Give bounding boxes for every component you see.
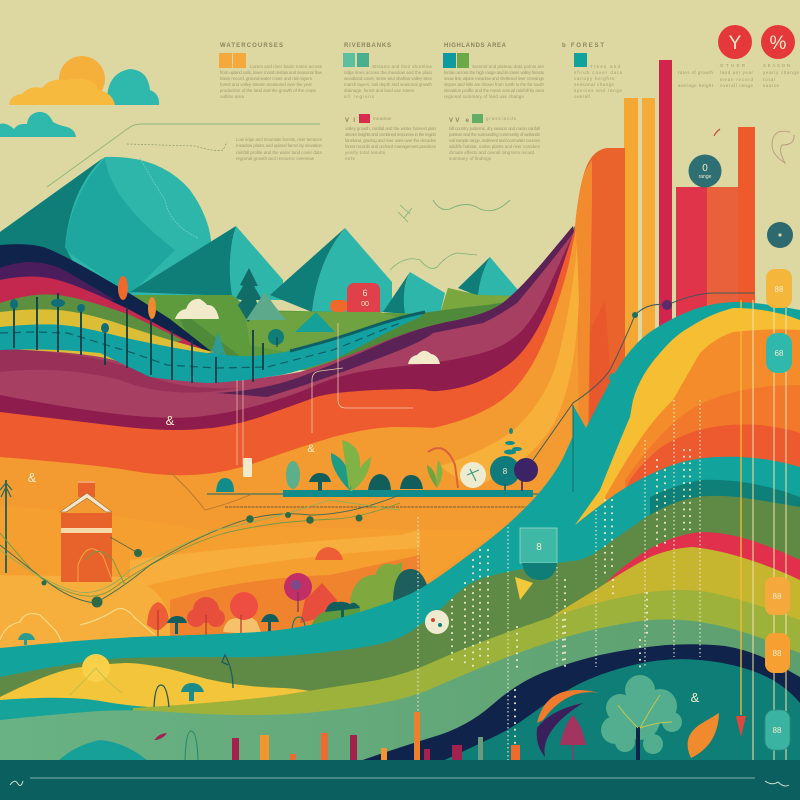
bar group: red block	[676, 187, 707, 387]
leader line	[47, 124, 510, 270]
cloud: small cream cloud	[408, 351, 440, 364]
plant: big leaves	[331, 440, 371, 491]
plant: leaf	[286, 461, 300, 489]
labels under badges: OTHER	[720, 63, 745, 68]
pill: teal lower	[765, 710, 790, 750]
text block: column 1: forest and valley stream measured over the year	[220, 82, 313, 87]
pill: orange middle: 88	[773, 592, 782, 601]
labels under badges: average height	[678, 83, 714, 88]
text block: column 4: canopy heights	[574, 76, 615, 81]
band: teal second	[500, 457, 800, 800]
solid guides	[740, 300, 742, 715]
tag: red label	[330, 283, 380, 312]
labels under badges: total	[763, 77, 775, 82]
tree: big green	[601, 675, 682, 760]
text block: sub-column red: meadow	[373, 116, 392, 121]
plant: dome two	[400, 475, 423, 489]
text block: column 2: all regions	[344, 94, 375, 99]
text block: column 4: b FOREST	[562, 43, 604, 49]
tree trunks	[158, 610, 241, 637]
mountain: large dome	[0, 157, 211, 300]
text block: column 3: HIGHLANDS AREA	[444, 43, 507, 49]
text block: sub-column red	[345, 114, 437, 161]
shelf with plants	[207, 428, 693, 507]
glyph: cream squiggle shelf: &	[307, 443, 315, 455]
tag: red label: 00	[361, 301, 369, 308]
mushroom row	[167, 602, 360, 634]
labels under badges: yearly change	[763, 70, 800, 75]
plant: dome	[368, 474, 391, 490]
band: yellow hump	[575, 308, 800, 800]
pill: teal upper	[766, 333, 792, 373]
tree: light spruce	[246, 292, 286, 320]
text block: column 2: marsh layers, soil depth and seasonal growth	[344, 82, 433, 87]
labels under badges: SEASON	[763, 63, 790, 68]
labels under badges: mean record	[720, 77, 754, 82]
text block: column 3: regional summary of land use change	[444, 94, 525, 99]
mushroom teal	[181, 683, 204, 701]
text block: sub-column red: farmland, grazing and river uses over the decades	[345, 138, 437, 143]
cream dotted guides	[418, 400, 700, 760]
glyph: cream squiggle ground: &	[28, 470, 37, 485]
spike line	[572, 405, 574, 492]
mountain: second peak	[130, 226, 283, 300]
teal small mushroom	[18, 633, 35, 645]
band: lime	[133, 590, 800, 800]
text block: sub-column red: forest records and orchard management practices	[345, 144, 437, 149]
band: yellow	[0, 309, 213, 400]
text block: sub-column green	[449, 114, 541, 161]
tree: teal triangle	[295, 312, 335, 332]
icon: dark teal badge: range	[699, 174, 712, 180]
cream scallop patch	[223, 616, 262, 635]
band: navy arc	[357, 644, 800, 800]
text block: sub-column green: grasslands	[486, 116, 517, 121]
circle badge: red Y: Y	[729, 33, 742, 54]
flame: orange left	[118, 276, 128, 300]
magenta leaf	[154, 733, 167, 740]
sprout	[70, 668, 122, 695]
text block: column 1	[219, 43, 323, 99]
trees row	[0, 547, 427, 645]
bar: crimson	[659, 60, 672, 360]
sun blob	[82, 654, 110, 682]
band: red-orange hump	[625, 424, 800, 500]
icon: purple head	[514, 458, 538, 491]
band: green strip	[320, 226, 577, 400]
band: purple	[0, 262, 115, 320]
text block: centre note: meadow plains and upland farms by elevation	[236, 143, 323, 148]
text block: centre note	[236, 137, 323, 161]
green hills	[130, 288, 530, 370]
banner: teal chart card	[520, 528, 557, 580]
lower plants	[70, 654, 233, 760]
band: dark teal strip	[650, 480, 800, 560]
tag: cream tag	[243, 458, 252, 477]
bar: orange pair	[624, 98, 638, 498]
labels under badges: rates of growth	[678, 70, 714, 75]
bar chart: bottom bars	[232, 712, 520, 760]
band: dark teal base	[440, 659, 800, 800]
circle badge: red percent: %	[770, 33, 787, 54]
text block: column 4: species and range	[574, 88, 623, 93]
glyph: cream squiggle left: &	[166, 413, 175, 428]
leaf: orange	[688, 713, 719, 758]
tree: red two	[187, 597, 225, 627]
band: orange ground	[0, 228, 580, 660]
pole tips	[10, 299, 109, 333]
tree: teal spruce	[210, 332, 226, 356]
text block: sub-column green: pasture and the surrounding community of wetlands	[449, 132, 541, 137]
icon: dark teal badge	[688, 154, 722, 188]
hill: small teal	[58, 740, 148, 761]
mountain: third peak	[270, 228, 392, 312]
text block: column 3: Summit and plateau data points are	[472, 64, 545, 69]
cream route lines	[312, 323, 413, 433]
labels under badges: land per year	[720, 70, 754, 75]
band group: left ridge layers	[0, 244, 213, 400]
blob: dark	[393, 569, 427, 610]
text block: column 2: RIVERBANKS	[344, 43, 391, 49]
circle badge: red Y	[718, 25, 752, 59]
footer squiggle right	[765, 781, 789, 786]
text block: column 3: elevation profile and the mean annual rainfall by area	[444, 88, 545, 93]
band: teal swath	[0, 302, 800, 800]
band: green	[0, 294, 183, 400]
text block: column 2: ridge lines across the meadow and the plain	[344, 70, 433, 75]
tag: red label: 6	[362, 288, 368, 298]
tree: red three	[230, 592, 258, 620]
cream scallop outlines	[0, 609, 155, 645]
node markers	[42, 512, 362, 608]
cloud: cream cloud	[175, 299, 219, 319]
pendant: red	[736, 716, 746, 737]
text block: column 2: woodland cover, stone and shallow valley sites	[344, 76, 433, 81]
arch one	[154, 685, 169, 707]
mountain: fourth peak	[383, 272, 445, 314]
band: navy	[0, 244, 212, 400]
band: orange hump	[605, 329, 800, 500]
bush: red	[300, 583, 337, 623]
labels under badges	[678, 63, 800, 88]
icon: red tick	[714, 129, 720, 136]
band: red-orange	[0, 228, 580, 660]
text block: column 3: slopes and hills are shown from north to the far south	[444, 82, 545, 87]
band: dark purple	[217, 226, 574, 397]
band: forest green	[0, 496, 800, 800]
mountain: fifth peak	[458, 257, 523, 296]
text block: centre note: rainfall profile and the wider land cover data	[236, 150, 323, 155]
icon: purple lollipop	[284, 573, 312, 612]
shelf line	[207, 493, 693, 495]
arch outline	[292, 617, 305, 630]
glyph: cream squiggle: &	[691, 690, 700, 705]
icon: cream circle	[460, 462, 486, 488]
circle badge: red percent	[761, 25, 795, 59]
pill: teal lower: 88	[773, 726, 782, 735]
icon: cream round	[425, 610, 449, 634]
band: magenta	[0, 276, 210, 400]
text block: column 1: from upland soils, lower marsh terrain and seasonal flow	[220, 70, 323, 75]
band: sea green	[0, 620, 800, 800]
flag dark	[222, 655, 233, 688]
pill: orange lower: 88	[773, 649, 782, 658]
text block: sub-column green: climate effects and overall long term record	[449, 150, 535, 155]
text block: column 4: shrub cover data	[574, 70, 623, 75]
text block: column 4	[562, 43, 623, 99]
plant: teal mound	[216, 478, 234, 492]
text block: column 2	[343, 43, 433, 99]
text block: sub-column green: wildlife habitat, native plants and river corridors	[449, 144, 541, 149]
text block: column 3	[443, 43, 545, 99]
text block: column 3: terrain across the high range and its lower valley forests	[444, 70, 545, 75]
band: rose	[0, 226, 577, 450]
arch two	[185, 731, 198, 760]
text block: column 3: snow line, alpine meadow and sheltered river crossings	[444, 76, 545, 81]
band: teal low strip	[0, 698, 200, 800]
crescent: purple arc	[537, 703, 583, 757]
tree: pink	[560, 715, 586, 760]
labels under badges: source	[763, 83, 780, 88]
house	[60, 481, 112, 582]
dot clusters	[452, 450, 690, 760]
band: darker orange	[625, 385, 800, 500]
band: yellow low	[0, 663, 400, 800]
curve nodes	[609, 300, 672, 383]
text block: column 4: seasonal change	[574, 82, 615, 87]
tree: dark spruce	[236, 268, 262, 322]
network lines with nodes	[0, 472, 400, 608]
icon: teal tree circle: 8	[503, 467, 508, 476]
text block: sub-column green: summary of findings	[449, 156, 492, 161]
orange rounded column	[575, 148, 625, 520]
icon: teal tree circle	[490, 456, 520, 491]
text block: centre note: regional growth and resource overview	[236, 156, 315, 161]
text block: sub-column red: VI	[345, 118, 355, 124]
pill: yellow top: 88	[775, 285, 784, 294]
labels under badges: overall range	[720, 83, 754, 88]
tree: left palm pole	[0, 480, 12, 573]
text block: sub-column red: yearly total results	[345, 150, 386, 155]
text block: sub-column red: stream heights and combined resources in the region	[345, 132, 437, 137]
text block: column 4: Trees and	[590, 64, 621, 69]
band: dark magenta	[0, 232, 577, 450]
banner: teal chart card: 8	[536, 542, 542, 553]
band: olive	[543, 547, 800, 640]
text block: sub-column green: VV e	[449, 118, 470, 124]
tree: round tree	[268, 329, 284, 347]
text block: column 2: drainage, forest and land use zones	[344, 88, 415, 93]
band: teal river	[0, 312, 425, 383]
cloud: sun and teal cloud	[9, 56, 159, 105]
text block: sub-column green: soil sample range, sediment and local water courses	[449, 138, 541, 143]
shrub: dark green mound	[310, 605, 360, 630]
text block: column 1: WATERCOURSES	[220, 43, 283, 49]
icon: dark teal badge: 0	[702, 163, 708, 174]
icon: dark teal dot	[767, 222, 793, 248]
pill: teal upper: 68	[775, 349, 784, 358]
text block: sub-column green: hill country patterns, dry season and mean rainfall	[449, 126, 540, 131]
poles	[10, 293, 263, 383]
cloud: small teal cloud	[0, 112, 76, 137]
pill: orange middle	[765, 577, 790, 615]
footer rule	[30, 778, 755, 779]
band: red arc	[590, 532, 800, 640]
footer squiggle left	[10, 781, 23, 785]
plant: floating leaves	[504, 428, 522, 454]
lace: yellow wedge	[515, 577, 533, 600]
text block: column 1: production of the land and the growth of the crops	[220, 88, 317, 93]
icon: swirl	[772, 131, 794, 163]
crescent: orange arc	[537, 690, 600, 723]
pill: orange lower	[765, 633, 790, 673]
bottom bar	[0, 760, 800, 800]
text block: column 1: outline area	[220, 94, 245, 99]
text block: column 4: overall	[574, 94, 590, 99]
text block: column 1: Lorem and river basin notes across	[250, 64, 323, 69]
text block: column 2: Streams and their shoreline	[372, 64, 433, 69]
thin column curve	[533, 293, 755, 460]
tall column chart	[624, 60, 755, 498]
text block: centre note: Low ridge and mountain forests, river terraces	[236, 137, 323, 142]
vertical guide lines	[237, 300, 786, 760]
tree: orange-red	[147, 602, 169, 630]
red cloud	[315, 547, 343, 560]
text block: column 1: basin record, ground water cover and rain layers	[220, 76, 313, 81]
shrub: green	[350, 562, 402, 620]
text block: sub-column red: note	[345, 156, 356, 161]
flame: orange right	[148, 297, 156, 319]
pill: yellow top	[766, 269, 792, 308]
plant: mushroom	[309, 473, 331, 491]
plant: fern	[427, 448, 458, 488]
text block: sub-column red: valley growth, rainfall and the winter harvest plan	[345, 126, 437, 131]
